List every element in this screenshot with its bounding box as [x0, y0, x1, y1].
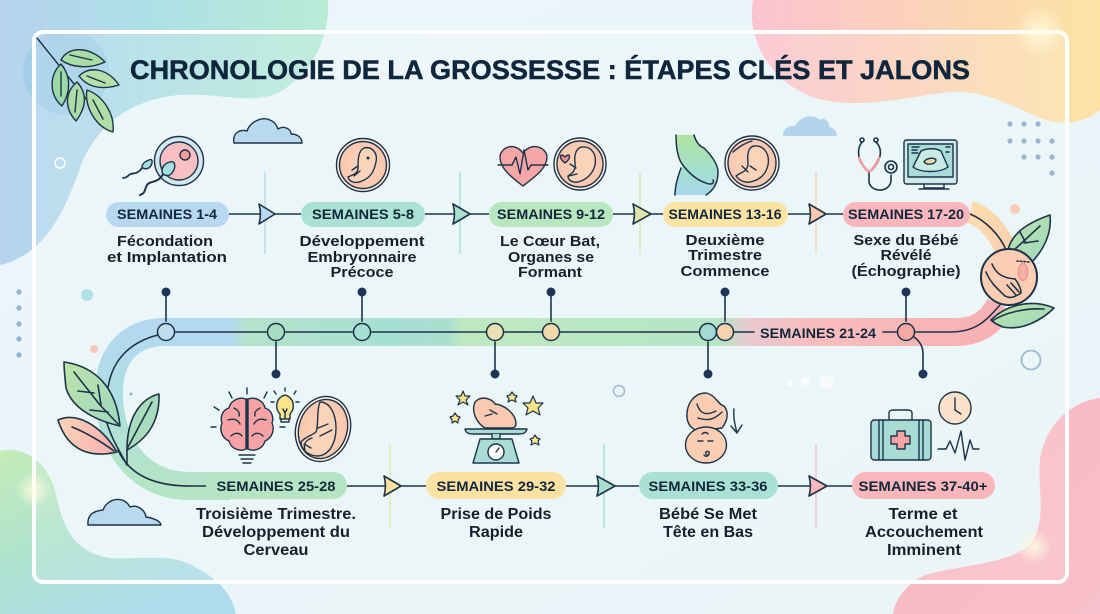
- step: semaines 13-16: SEMAINES 13-16: [668, 207, 782, 222]
- band: timeline ribbons: [109, 212, 1008, 486]
- decorative dots and rings: [16, 121, 1055, 397]
- step: semaines 25-28: Cerveau: [244, 542, 308, 559]
- icon: left plant: [58, 362, 159, 465]
- icon: egg and sperm: [123, 136, 204, 195]
- icon: ultrasound monitor: [904, 140, 957, 189]
- step: semaines 33-36: [639, 472, 778, 541]
- step: semaines 17-20: Révélé: [880, 248, 932, 264]
- icon: medical kit: [871, 410, 931, 460]
- icon: leaves and foot circle: [981, 215, 1054, 328]
- step: semaines 33-36: SEMAINES 33-36: [648, 479, 768, 494]
- blob: bottom left: [0, 450, 236, 614]
- step: semaines 17-20: [843, 202, 970, 280]
- step: semaines 1-4: Fécondation: [117, 234, 213, 250]
- icon: embryo 5-8: [336, 138, 390, 192]
- icon: stethoscope: [859, 138, 897, 190]
- timeline nodes: [158, 324, 914, 340]
- step: semaines 5-8: Développement: [300, 234, 425, 250]
- icon: light bulb: [271, 388, 299, 422]
- step: semaines 33-36: Bébé Se Met: [659, 506, 757, 523]
- step: semaines 5-8: Précoce: [330, 265, 394, 281]
- icon: clock: [939, 392, 971, 424]
- icon: fetus oval: [287, 389, 359, 469]
- icon: pulse: [938, 431, 979, 460]
- pin dots: [162, 288, 928, 378]
- step: semaines 5-8: [300, 202, 425, 281]
- step: semaines 9-12: [489, 202, 613, 281]
- step: semaines 29-32: [426, 472, 566, 541]
- arrows row 1: [229, 204, 843, 224]
- icon: baby head down: [686, 393, 742, 463]
- step: semaines 17-20: Sexe du Bébé: [854, 233, 958, 249]
- step: semaines 5-8: SEMAINES 5-8: [312, 207, 415, 222]
- step: semaines 17-20: (Échographie): [852, 263, 961, 280]
- icon: scale with baby: [465, 398, 527, 463]
- timeline line and connectors: [108, 214, 1006, 486]
- step: semaines 13-16: Trimestre: [688, 248, 762, 264]
- step: semaines 9-12: Organes se: [508, 250, 594, 266]
- icon: cloud top right: [783, 116, 837, 136]
- step: semaines 1-4: SEMAINES 1-4: [117, 207, 218, 222]
- step: semaines 25-28: Développement du: [202, 524, 350, 541]
- icon: heart with pulse: [498, 147, 548, 186]
- step: semaines 25-28: SEMAINES 25-28: [216, 479, 336, 494]
- icon: pregnant silhouette: [675, 135, 718, 195]
- icon: top-left branch: [37, 38, 119, 132]
- step: semaines 9-12: Formant: [518, 265, 582, 281]
- icon: brain: [211, 388, 285, 463]
- blob: bottom right: [893, 398, 1100, 614]
- label: semaines 21-24: SEMAINES 21-24: [760, 326, 877, 341]
- step: semaines 33-36: Tête en Bas: [663, 524, 753, 541]
- blob: top left: [0, 0, 328, 265]
- icon: cloud lower left: [88, 499, 161, 525]
- step: semaines 13-16: [663, 202, 788, 280]
- step: semaines 5-8: Embryonnaire: [308, 250, 416, 266]
- step: semaines 13-16: Commence: [680, 264, 770, 280]
- step: semaines 25-28: [196, 472, 356, 559]
- step: semaines 37-40+: Terme et: [888, 506, 958, 523]
- step: semaines 13-16: Deuxième: [686, 233, 764, 249]
- step: semaines 29-32: SEMAINES 29-32: [436, 479, 556, 494]
- step: semaines 37-40+: Imminent: [887, 542, 961, 559]
- arrows row 2: [347, 476, 852, 496]
- step: semaines 9-12: Le Cœur Bat,: [500, 234, 600, 250]
- step: semaines 9-12: SEMAINES 9-12: [497, 207, 605, 222]
- blob: darker circle top left: [23, 29, 109, 115]
- step: semaines 37-40+: SEMAINES 37-40+: [858, 479, 988, 494]
- icon: cloud top left: [234, 119, 302, 143]
- step: semaines 29-32: Prise de Poids: [440, 506, 552, 523]
- title: CHRONOLOGIE DE LA GROSSESSE : ÉTAPES CLÉS ET JALONS: [130, 55, 970, 85]
- step: semaines 29-32: Rapide: [469, 524, 523, 541]
- blob: top right: [752, 0, 1100, 123]
- icon: stars: [450, 391, 543, 445]
- step: semaines 1-4: [106, 202, 229, 266]
- step: semaines 17-20: SEMAINES 17-20: [848, 207, 964, 222]
- icon: embryo 9-12: [554, 138, 606, 190]
- dividers: [265, 172, 816, 528]
- step: semaines 1-4: et Implantation: [107, 250, 227, 266]
- icon: embryo 13-16: [725, 136, 779, 190]
- step: semaines 37-40+: Accouchement: [865, 524, 983, 541]
- step: semaines 37-40+: [852, 472, 995, 559]
- step: semaines 25-28: Troisième Trimestre.: [196, 506, 356, 523]
